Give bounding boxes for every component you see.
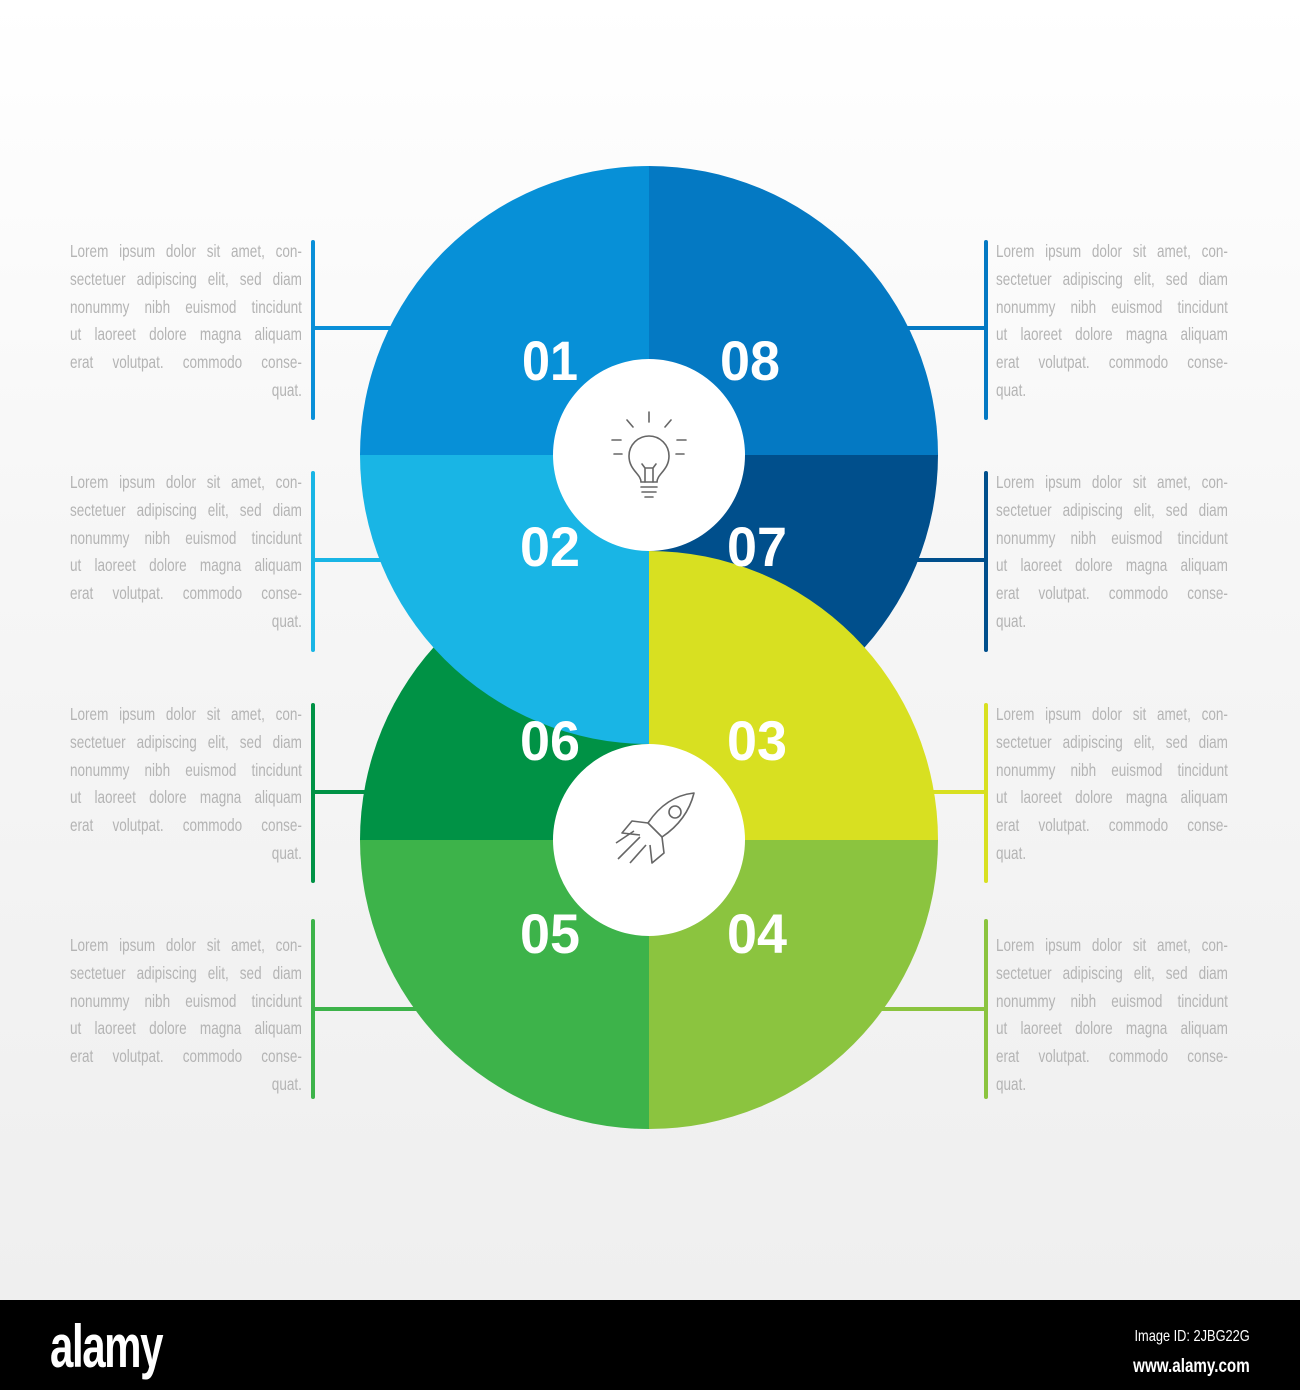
text block left 4: Lorem ipsum dolor sit amet, con- [70, 935, 302, 955]
text block right 1: sectetuer adipiscing elit, sed diam [996, 269, 1228, 289]
text block left 1: erat volutpat. commodo conse- [70, 352, 302, 372]
segment 05 [360, 840, 649, 1129]
numbers: 02 [520, 515, 580, 578]
text block right 4: Lorem ipsum dolor sit amet, con- [996, 935, 1228, 955]
text block right 2 [996, 472, 1228, 631]
text block right 4: sectetuer adipiscing elit, sed diam [996, 963, 1228, 983]
image id: Image ID: 2JBG22G [1135, 1328, 1250, 1345]
text block right 4: nonummy nibh euismod tincidunt [996, 991, 1228, 1011]
text block left 2: Lorem ipsum dolor sit amet, con- [70, 472, 302, 492]
text block left 3: nonummy nibh euismod tincidunt [70, 760, 302, 780]
text block left 4: erat volutpat. commodo conse- [70, 1046, 302, 1066]
text block right 4: quat. [996, 1074, 1026, 1094]
text block left 2: sectetuer adipiscing elit, sed diam [70, 500, 302, 520]
icon: light bulb [612, 412, 686, 497]
text block left 2: ut laoreet dolore magna aliquam [70, 555, 302, 575]
numbers [520, 329, 787, 965]
text block right 3: erat volutpat. commodo conse- [996, 815, 1228, 835]
text block right 1: erat volutpat. commodo conse- [996, 352, 1228, 372]
text block right 2: sectetuer adipiscing elit, sed diam [996, 500, 1228, 520]
footer bar [0, 1300, 1300, 1390]
text block left 3: erat volutpat. commodo conse- [70, 815, 302, 835]
text block left 3: Lorem ipsum dolor sit amet, con- [70, 704, 302, 724]
numbers: 01 [522, 329, 578, 392]
segment 02 [360, 455, 649, 744]
text block left 3: quat. [272, 843, 302, 863]
text block left 2: quat. [272, 611, 302, 631]
text block right 1: Lorem ipsum dolor sit amet, con- [996, 241, 1228, 261]
text block right 3 [996, 704, 1228, 863]
text block right 3: ut laoreet dolore magna aliquam [996, 787, 1228, 807]
text block left 1: nonummy nibh euismod tincidunt [70, 297, 302, 317]
text block left 3: sectetuer adipiscing elit, sed diam [70, 732, 302, 752]
segment 03 [649, 551, 938, 840]
segment 07 [649, 455, 938, 744]
text block right 2: ut laoreet dolore magna aliquam [996, 555, 1228, 575]
numbers: 03 [727, 709, 787, 772]
text block right 1: ut laoreet dolore magna aliquam [996, 324, 1228, 344]
numbers: 08 [720, 329, 780, 392]
numbers: 04 [727, 902, 787, 965]
image id: www.alamy.com [1133, 1356, 1250, 1377]
text block left 1: ut laoreet dolore magna aliquam [70, 324, 302, 344]
text block right 2: Lorem ipsum dolor sit amet, con- [996, 472, 1228, 492]
segment 08 [649, 166, 938, 455]
text block right 1: nonummy nibh euismod tincidunt [996, 297, 1228, 317]
text block right 3: sectetuer adipiscing elit, sed diam [996, 732, 1228, 752]
text block left 2: erat volutpat. commodo conse- [70, 583, 302, 603]
center circle top [553, 359, 745, 551]
connector lines [313, 242, 986, 1097]
text block left 4: nonummy nibh euismod tincidunt [70, 991, 302, 1011]
segment 04 [649, 840, 938, 1129]
text block right 3: quat. [996, 843, 1026, 863]
text block right 4: erat volutpat. commodo conse- [996, 1046, 1228, 1066]
text block right 4: ut laoreet dolore magna aliquam [996, 1018, 1228, 1038]
numbers: 05 [520, 902, 580, 965]
image id [1133, 1328, 1250, 1377]
text block left 3: ut laoreet dolore magna aliquam [70, 787, 302, 807]
text block left 4: ut laoreet dolore magna aliquam [70, 1018, 302, 1038]
logo: alamy [50, 1313, 162, 1380]
text block left 4: quat. [272, 1074, 302, 1094]
text block left 1: quat. [272, 380, 302, 400]
segment 01 [360, 166, 649, 455]
text block right 3: Lorem ipsum dolor sit amet, con- [996, 704, 1228, 724]
text block right 2: nonummy nibh euismod tincidunt [996, 528, 1228, 548]
text block left 1 [70, 241, 302, 400]
numbers: 06 [520, 709, 580, 772]
text block right 2: quat. [996, 611, 1026, 631]
text block left 3 [70, 704, 302, 863]
text block right 1 [996, 241, 1228, 400]
icon: rocket [616, 793, 694, 863]
text block left 4 [70, 935, 302, 1094]
text block right 4 [996, 935, 1228, 1094]
text block left 1: Lorem ipsum dolor sit amet, con- [70, 241, 302, 261]
center circle bottom [553, 744, 745, 936]
text block right 3: nonummy nibh euismod tincidunt [996, 760, 1228, 780]
text block left 4: sectetuer adipiscing elit, sed diam [70, 963, 302, 983]
text block left 2 [70, 472, 302, 631]
text block right 2: erat volutpat. commodo conse- [996, 583, 1228, 603]
text block left 2: nonummy nibh euismod tincidunt [70, 528, 302, 548]
text block right 1: quat. [996, 380, 1026, 400]
text block left 1: sectetuer adipiscing elit, sed diam [70, 269, 302, 289]
numbers: 07 [727, 515, 787, 578]
segment 06 [360, 551, 649, 840]
